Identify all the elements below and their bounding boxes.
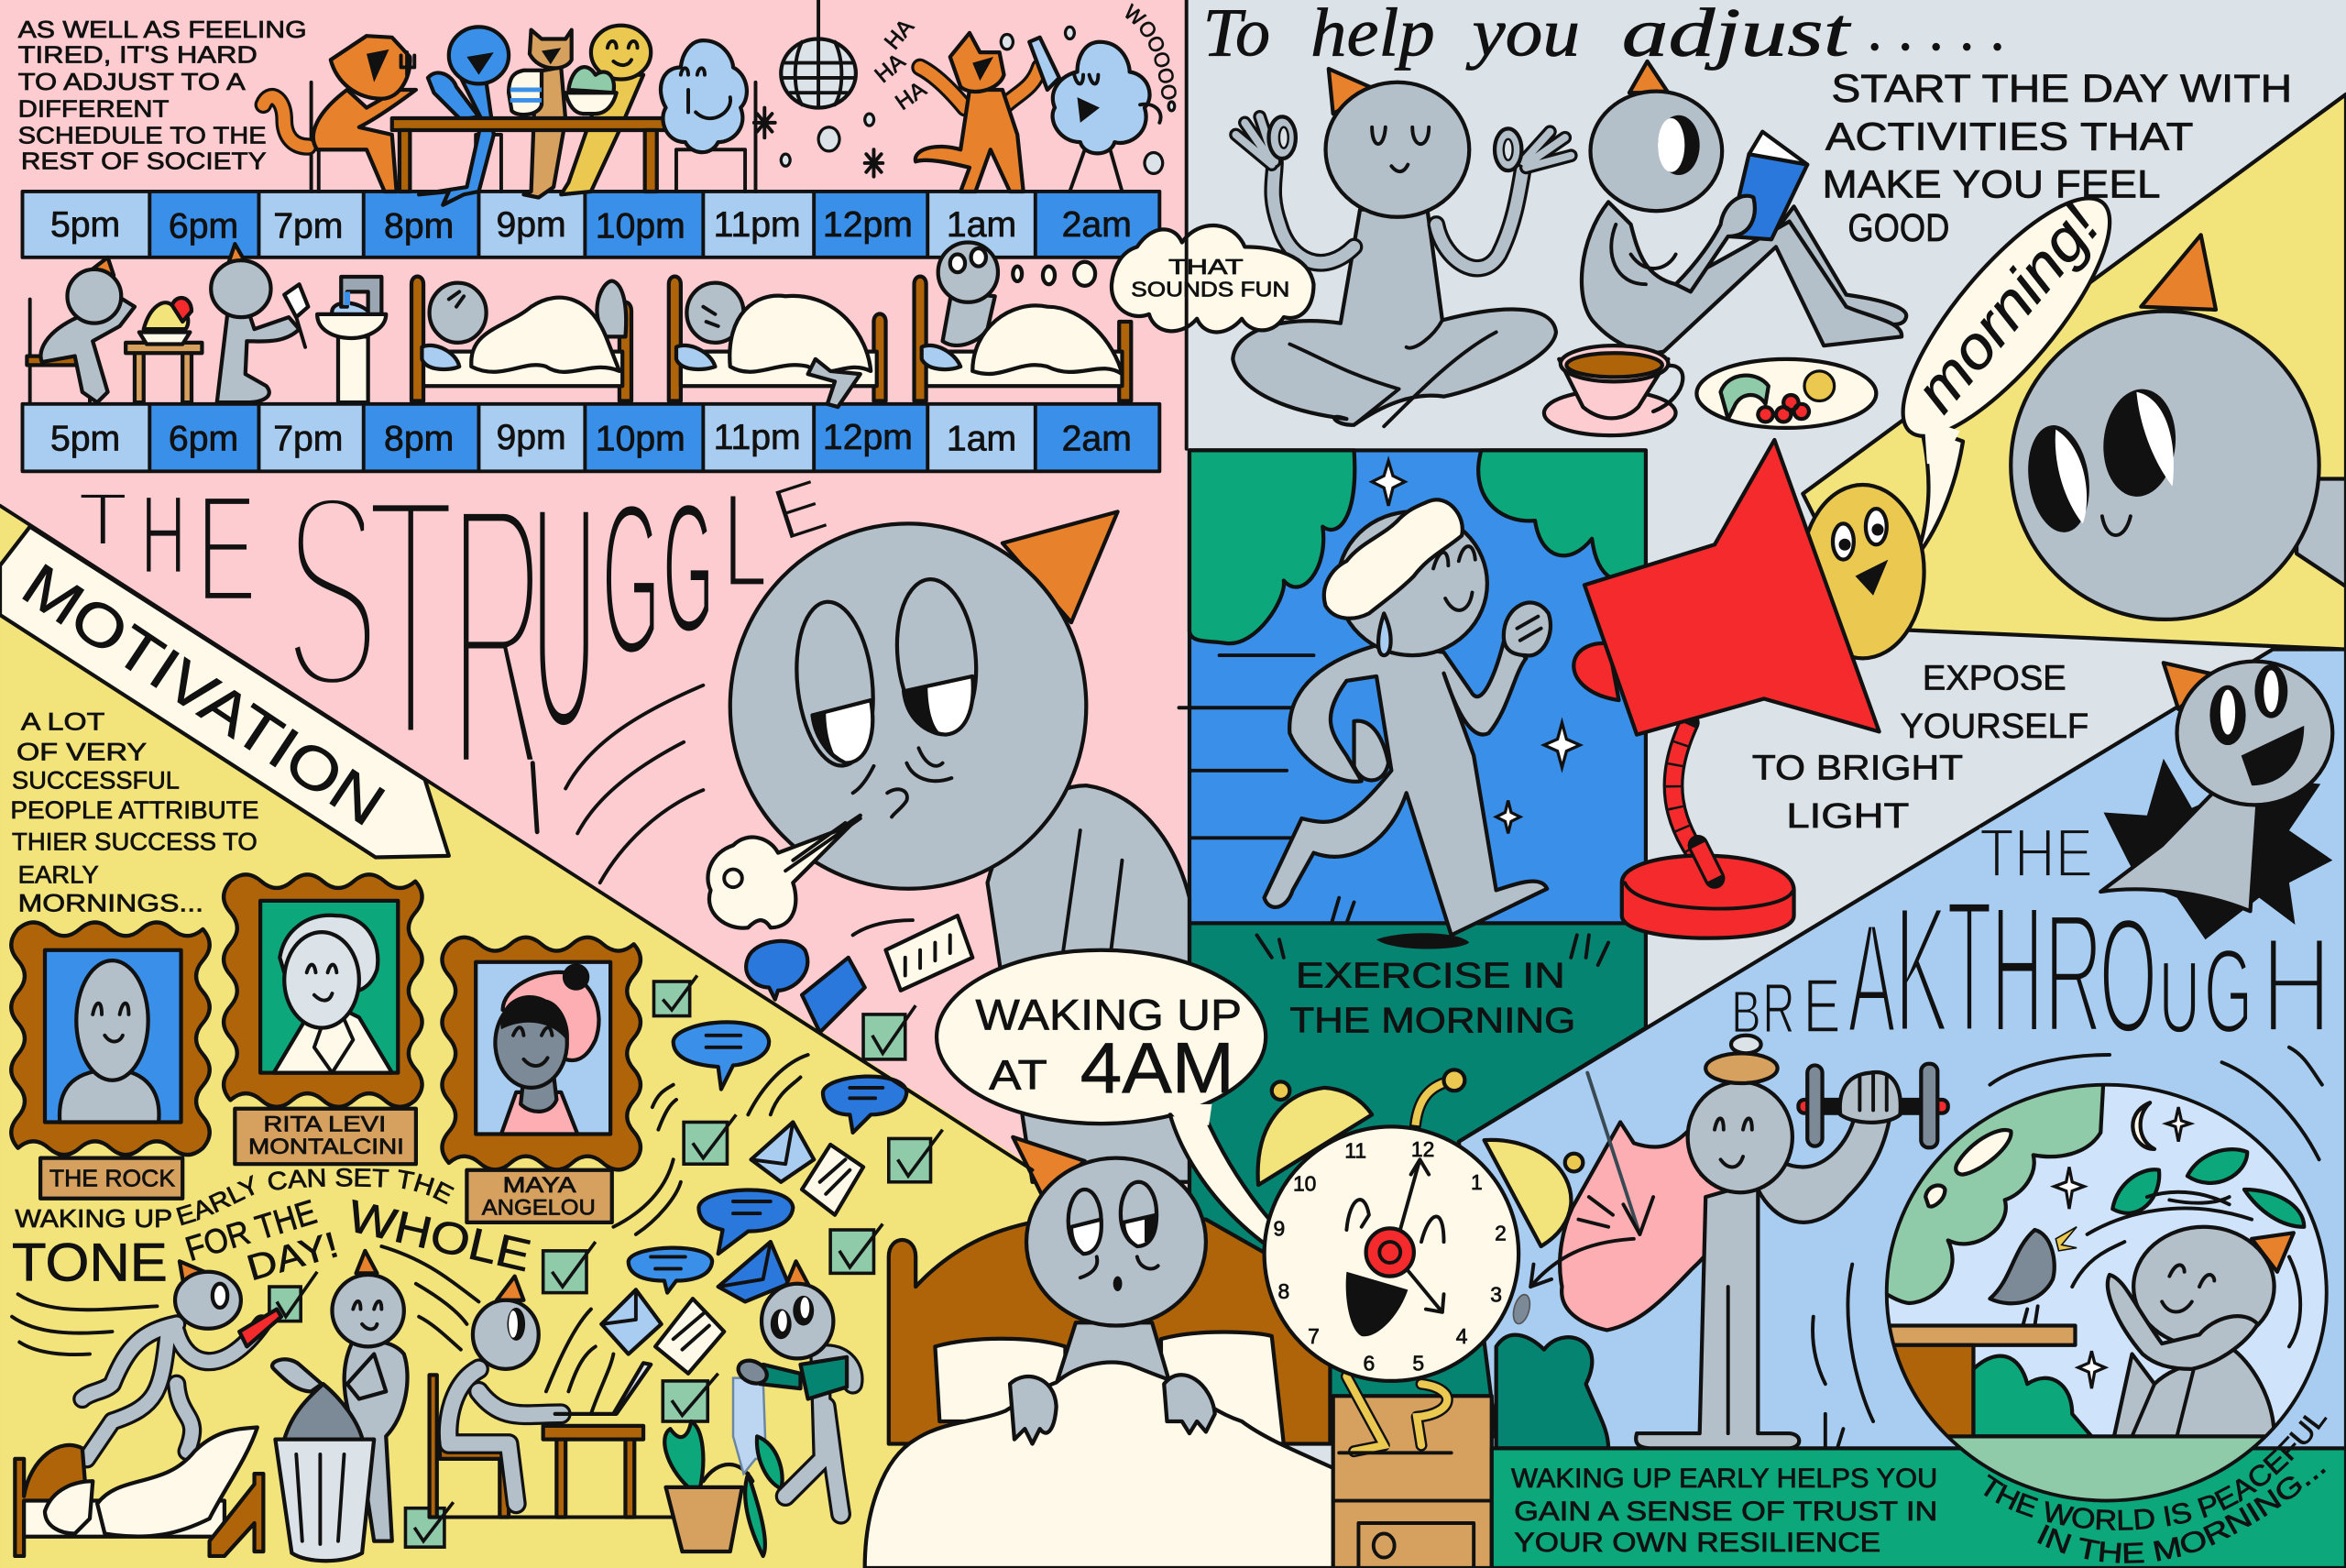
breath puff (707, 816, 861, 928)
title: the struggle: L (723, 465, 768, 616)
text: a lot of very successful (10, 708, 258, 916)
flying envelopes and papers (601, 1122, 863, 1374)
laptop figure (430, 1277, 674, 1517)
speech bubble: waking up at 4am: AT (989, 1052, 1047, 1099)
timeline row two: 8pm (384, 419, 454, 458)
timeline row one: 7pm (273, 207, 343, 247)
label: maya angelou: ANGELOU (482, 1197, 596, 1221)
text: laughing sounds: HA (871, 49, 911, 88)
thought cloud: that sounds fun: THAT (1168, 255, 1244, 279)
label: the rock (40, 1158, 182, 1199)
timeline row one: 8pm (384, 207, 454, 247)
timeline row two: 10pm (596, 419, 685, 458)
text: a lot of very successful: MORNINGS... (18, 889, 203, 916)
dumbbell figure (1510, 1036, 1948, 1448)
speech bubble: morning (1872, 170, 2141, 556)
watering figure (733, 1261, 853, 1514)
clock face numbers: 1 (1471, 1170, 1483, 1194)
trash figure and bin (272, 1251, 408, 1561)
speech bubble: waking up at 4am: WAKING UP (975, 991, 1242, 1039)
timeline row two: 9pm (496, 418, 566, 457)
fist (1504, 603, 1551, 655)
cape (1560, 1122, 1752, 1330)
clock face numbers: 5 (1412, 1351, 1424, 1375)
timeline row two: 2am (1062, 419, 1132, 458)
thought cloud: that sounds fun (1112, 225, 1313, 332)
timeline row one: 1am (947, 205, 1016, 245)
timeline row one: 9pm (496, 205, 566, 245)
text: waking up early helps you (1511, 1464, 1937, 1558)
timeline row two: 6pm (169, 419, 238, 458)
title: the struggle: R (449, 419, 546, 854)
awake bed three (915, 242, 1131, 401)
title: the breakthrough: H (1991, 869, 2044, 1072)
title: the struggle: S (283, 433, 380, 748)
title: the breakthrough: A (1847, 891, 1896, 1067)
text: exercise in the morning: EXERCISE IN (1296, 957, 1565, 996)
toothbrush figure (211, 244, 308, 402)
eating figure (27, 258, 202, 402)
timeline row two: 11pm (714, 418, 801, 457)
label: rita levi montalcini: MONTALCINI (248, 1135, 404, 1159)
banner: motivation: MOTIVATION (11, 551, 397, 839)
text: a lot of very successful: THIER SUCCESS TO (12, 828, 258, 855)
icon: disco ball (781, 0, 856, 108)
text: expose yourself: EXPOSE (1923, 659, 2066, 697)
clock face numbers (1274, 1137, 1507, 1375)
title: the struggle: E (196, 463, 257, 635)
dancing cat and cloud (915, 33, 1161, 192)
title: the breakthrough: R (2044, 878, 2103, 1069)
text: waking up early helps you: GAIN A SENSE OF TRUST IN (1514, 1497, 1937, 1527)
jumping figure (82, 1261, 281, 1459)
speech bubble: waking up at 4am (937, 950, 1339, 1282)
portrait: rita levi montalcini (224, 874, 422, 1164)
panel: yellow light wedge (1803, 94, 2346, 650)
leaves, moon, sparkles (2112, 1149, 2304, 1227)
text: a lot of very successful: OF VERY (16, 738, 147, 765)
text: start the day: START THE DAY WITH (1831, 67, 2292, 110)
title: the struggle: H (140, 472, 186, 598)
table with food (392, 67, 667, 192)
top text: as well as feeling tired: AS WELL AS FEELING (18, 16, 307, 43)
timeline row one: 6pm (169, 207, 238, 247)
label: the rock: THE ROCK (49, 1165, 176, 1192)
top text: as well as feeling tired: REST OF SOCIETY (21, 147, 267, 174)
text: expose yourself: LIGHT (1786, 796, 1909, 835)
text: waking up early can set the tone: DAY! (243, 1225, 343, 1288)
panel: dark green lower band (1189, 922, 1646, 1436)
portrait: the rock (11, 923, 210, 1199)
panel: motivation background (0, 506, 1197, 1568)
clock face numbers: 6 (1364, 1351, 1375, 1375)
text: start the day: MAKE YOU FEEL (1823, 163, 2161, 206)
lamp neck (1673, 723, 1715, 878)
clock face numbers: 3 (1490, 1282, 1502, 1306)
text: waking up early helps you: YOUR OWN RESILIENCE (1514, 1528, 1880, 1558)
timeline row two: 7pm (273, 419, 343, 458)
clock face numbers: 9 (1274, 1217, 1285, 1241)
big tired figure (730, 511, 1189, 1182)
plant (664, 1421, 765, 1556)
sink (317, 277, 386, 402)
top text: as well as feeling tired: DIFFERENT (18, 94, 170, 122)
text: laughing sounds: WOOOOO (1125, 3, 1177, 100)
title: the breakthrough: E (1803, 962, 1841, 1049)
sleeping bed one (411, 277, 631, 401)
timeline row one: 5pm (50, 205, 120, 245)
clock face numbers: 2 (1495, 1221, 1507, 1245)
title: the breakthrough: U (2159, 942, 2200, 1055)
cloud friend (661, 40, 747, 152)
label: maya angelou (466, 1170, 612, 1223)
title: the breakthrough: B (1731, 980, 1761, 1046)
caped flying figure (2100, 662, 2332, 939)
timeline row one (23, 192, 1159, 258)
timeline row one: 11pm (714, 205, 801, 245)
motion lines (565, 685, 703, 883)
tan cat (523, 30, 572, 198)
alarm clock (1258, 1069, 1583, 1453)
speech bubble: waking up at 4am: 4AM (1080, 1027, 1234, 1108)
title: the breakthrough: R (1762, 969, 1795, 1047)
hands (1236, 116, 1571, 170)
clock face numbers: 12 (1411, 1137, 1434, 1161)
book (1729, 154, 1807, 239)
panel: adjust background (1187, 0, 2346, 1568)
peaceful morning scene (1878, 1047, 2341, 1511)
dumbbell (1798, 1064, 1948, 1147)
thought cloud: that sounds fun: SOUNDS FUN (1131, 277, 1289, 301)
text: waking up early can set the tone (12, 1168, 535, 1293)
blue friend (419, 27, 509, 205)
text: start the day (1823, 67, 2292, 249)
restless bed two (669, 277, 886, 407)
bed and headboard (865, 1220, 1365, 1568)
peaceful figure (2108, 1227, 2294, 1369)
title: to help you adjust (1203, 0, 2006, 71)
clock face numbers: 4 (1456, 1324, 1468, 1348)
tired figure in bed (1010, 1137, 1215, 1443)
sun face (1802, 485, 1924, 658)
panel: exercise scene (1179, 450, 1646, 965)
text: laughing sounds: HA (880, 14, 919, 54)
speech bubble: morning: morning! (1902, 192, 2112, 424)
timeline row two: 1am (947, 419, 1016, 458)
clock face numbers: 8 (1277, 1279, 1289, 1303)
text: waking up early can set the tone: WAKING UP EARLY CAN SET THE (15, 1168, 455, 1228)
text: waking up early can set the tone: TONE (12, 1234, 168, 1293)
flying checkboxes (269, 975, 943, 1547)
runner (1265, 499, 1551, 935)
flying speech bubbles (629, 1022, 906, 1293)
text: expose yourself: TO BRIGHT (1752, 749, 1963, 787)
text: waking up early can set the tone: FOR THE (181, 1192, 321, 1268)
title: the breakthrough: G (2204, 926, 2253, 1058)
icon: breakfast plate (1696, 359, 1876, 428)
bedside table (1333, 1396, 1492, 1568)
text: exercise in the morning (1289, 957, 1575, 1041)
text: start the day: ACTIVITIES THAT (1825, 115, 2193, 158)
panel: breakthrough background (1459, 650, 2346, 1568)
text: exercise in the morning: THE MORNING (1289, 1002, 1575, 1041)
top text: as well as feeling tired: TIRED, IT'S HARD (18, 41, 258, 69)
title: the struggle (78, 418, 837, 854)
banner: motivation (0, 527, 449, 857)
timeline row two: 12pm (823, 418, 913, 457)
evening routine row (27, 242, 1131, 407)
top text: as well as feeling tired: TO ADJUST TO A (18, 68, 246, 95)
timeline row one: 10pm (596, 207, 685, 247)
title: the struggle: T (365, 418, 456, 817)
orange cat (263, 36, 416, 192)
clock face numbers: 7 (1308, 1324, 1320, 1348)
panel: struggle background (0, 0, 1189, 1568)
text: a lot of very successful: PEOPLE ATTRIBUTE (10, 796, 258, 824)
title: the breakthrough: T (1946, 859, 1992, 1073)
text: expose yourself (1752, 659, 2088, 835)
title: the struggle: G (663, 465, 714, 671)
timeline row two (23, 404, 1159, 471)
title: the breakthrough: H (2261, 908, 2332, 1062)
bush (1496, 1335, 1608, 1448)
text: a lot of very successful: EARLY (18, 861, 99, 888)
text: waking up early can set the tone: WHOLE (344, 1191, 535, 1281)
top text: as well as feeling tired (18, 16, 307, 174)
text: expose yourself: YOURSELF (1900, 707, 2088, 745)
arc text: the world is peaceful: THE WORLD IS PEACEFUL (1983, 1415, 2328, 1530)
lamp (1573, 440, 1924, 938)
timeline row two: 5pm (50, 419, 120, 458)
title: the breakthrough: THE (1979, 815, 2093, 892)
title: the struggle: E (763, 463, 837, 557)
text: a lot of very successful: SUCCESSFUL (12, 766, 180, 794)
icon: right tree (1478, 450, 1646, 584)
text: waking up early helps you: WAKING UP EARLY HELPS YOU (1511, 1464, 1937, 1494)
clock face numbers: 11 (1344, 1139, 1366, 1163)
portrait: maya angelou (442, 938, 641, 1223)
icon: coffee cup (1544, 345, 1683, 435)
big smiling head (2011, 235, 2346, 620)
meditating figure (1233, 69, 1571, 426)
text: a lot of very successful: A LOT (21, 708, 104, 736)
title: the struggle: G (601, 457, 661, 700)
tired eyes (789, 576, 983, 770)
title: the struggle: U (532, 435, 597, 798)
timeline row one: 12pm (823, 205, 913, 245)
label: rita levi montalcini: RITA LEVI (263, 1113, 386, 1136)
reading figure (1582, 61, 1906, 353)
party table scene (263, 26, 755, 205)
arms (1273, 161, 1354, 263)
title: the breakthrough: O (2099, 883, 2157, 1068)
title: the breakthrough (1731, 815, 2332, 1073)
arc text: the world is peaceful: IN THE MORNING... (2037, 1468, 2326, 1563)
title: the breakthrough: K (1894, 867, 1949, 1071)
label: maya angelou: MAYA (503, 1174, 576, 1198)
label: rita levi montalcini (235, 1109, 416, 1164)
headband (1324, 499, 1463, 619)
icon: sparkles (1372, 461, 1580, 833)
icon: bubbles (781, 27, 1175, 173)
flying items in pink (746, 916, 972, 1033)
yellow friend (561, 26, 651, 194)
text: laughing sounds: HA (891, 77, 931, 115)
breakthrough bottom green band (1492, 1448, 2346, 1568)
timeline row one: 2am (1062, 205, 1132, 245)
text: laughing sounds (871, 3, 1177, 115)
small bed (15, 1428, 263, 1556)
bird (1990, 1227, 2077, 1326)
clock legs (1339, 1376, 1452, 1453)
clock face numbers: 10 (1293, 1172, 1316, 1196)
top text: as well as feeling tired: SCHEDULE TO THE (18, 122, 267, 149)
title: the struggle: T (78, 477, 128, 561)
icon: left tree (1189, 450, 1354, 643)
text: start the day: GOOD (1847, 206, 1949, 249)
